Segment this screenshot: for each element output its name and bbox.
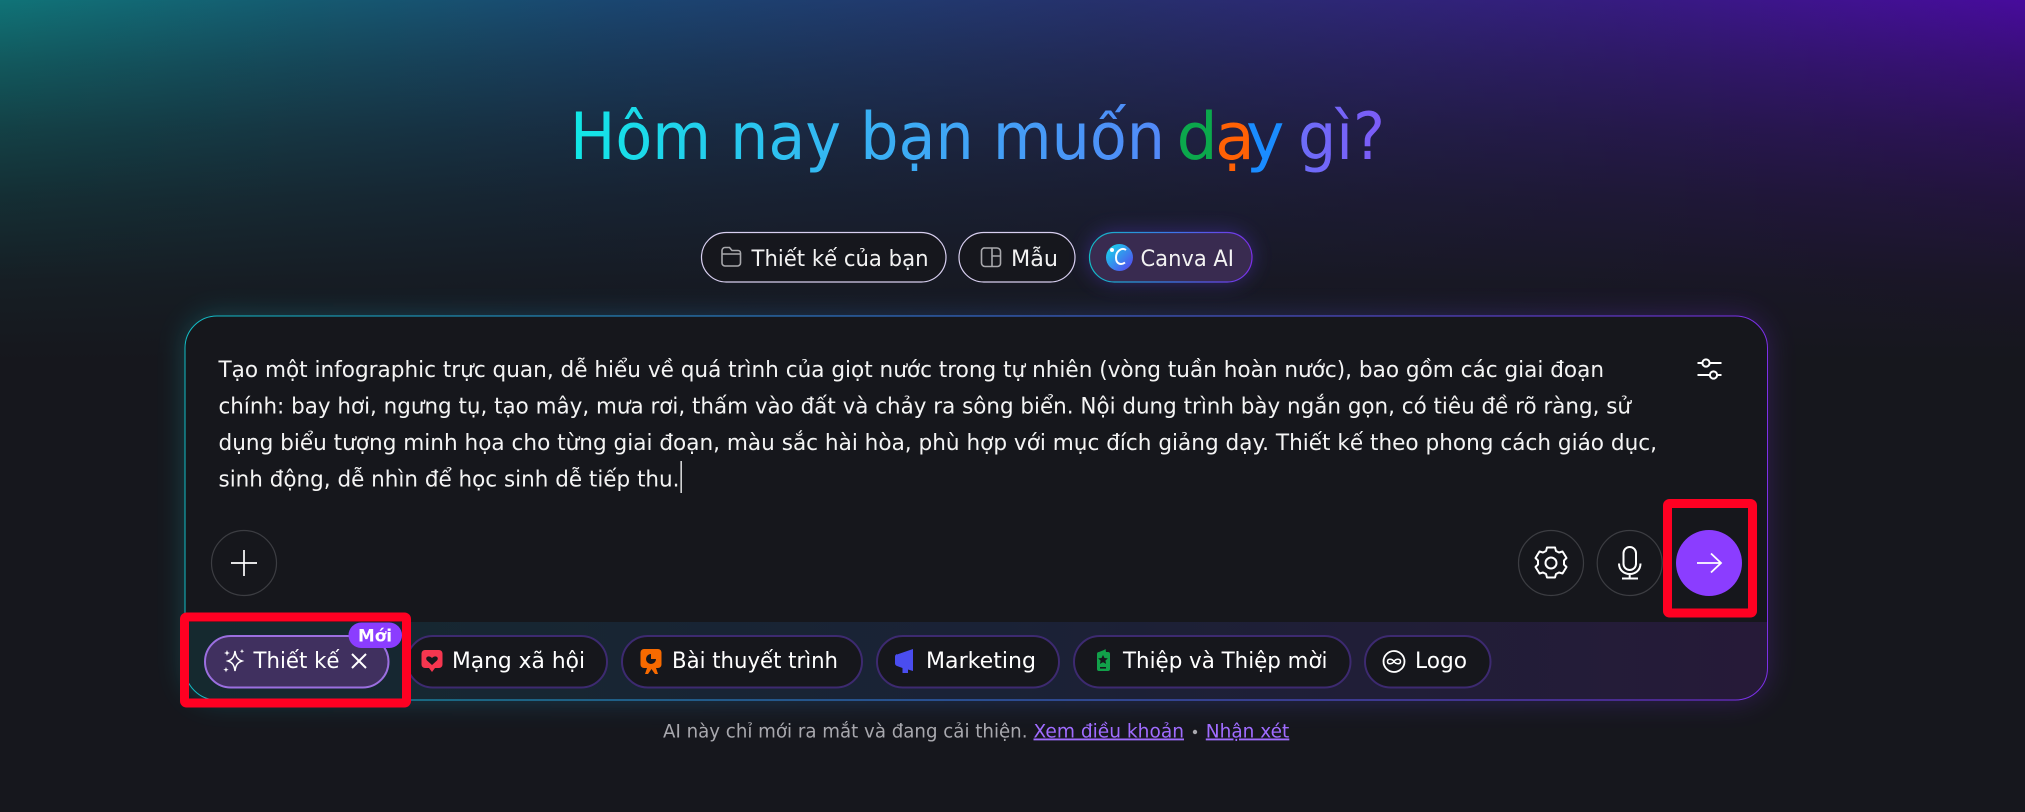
prompt text — [218, 355, 1657, 492]
title: d — [1176, 100, 1218, 175]
tab: Thiết kế của bạn: Thiết kế của bạn — [751, 246, 928, 272]
prompt text: dụng biểu tượng minh họa cho từng giai đoạn, màu sắc hài hòa, phù hợp với mục đích giảng dạy. Thiết kế theo phong cách giáo dục, — [218, 429, 1657, 456]
button: microphone — [1597, 530, 1662, 596]
red highlight: send button — [1668, 504, 1752, 613]
badge: new — [348, 622, 402, 648]
tab: Mẫu — [959, 232, 1075, 282]
badge: new: Mới — [358, 626, 392, 646]
tab: Thiết kế của bạn — [702, 232, 946, 282]
chip: Bài thuyết trình: Bài thuyết trình — [672, 648, 838, 674]
navigation tabs — [702, 232, 1252, 282]
prompt text: sinh động, dễ nhìn để học sinh dễ tiếp thu. — [218, 464, 680, 492]
button: add — [212, 530, 276, 596]
tab glow: Canva AI — [1089, 232, 1252, 282]
link: feedback: Nhận xét — [1206, 722, 1289, 742]
link: terms: Xem điều khoản — [1034, 720, 1184, 742]
red highlight: design chip — [184, 617, 406, 703]
chip: Thiệp và Thiệp mời — [1074, 636, 1350, 688]
prompt text: Tạo một infographic trực quan, dễ hiểu về quá trình của giọt nước trong tự nhiên (vòng tuần hoàn nước), bao gồm các giai đoạn — [218, 355, 1604, 383]
prompt card — [185, 316, 1768, 702]
icon: prompt settings sliders — [1698, 359, 1722, 379]
tab: Canva AI: Canva AI — [1140, 246, 1234, 272]
prompt text: chính: bay hơi, ngưng tụ, tạo mây, mưa rơi, thấm vào đất và chảy ra sông biển. Nội dung trình bày ngắn gọn, có tiêu đề rõ ràng, sử — [218, 392, 1633, 420]
category band — [185, 622, 1768, 702]
chip: Logo: Logo — [1415, 648, 1467, 674]
footer disclaimer — [663, 720, 1289, 742]
button: settings — [1518, 530, 1584, 596]
card border — [185, 316, 1768, 700]
chip: Thiệp và Thiệp mời: Thiệp và Thiệp mời — [1122, 648, 1328, 674]
title: ạ — [1215, 100, 1255, 175]
title: gì? — [1298, 100, 1385, 175]
text caret — [680, 461, 682, 493]
title: y — [1246, 100, 1284, 175]
card glow — [185, 316, 1768, 700]
title: Hôm nay bạn muốn — [570, 100, 1165, 175]
tab: Mẫu: Mẫu — [1011, 244, 1058, 272]
chip: Thiết kế selected: Thiết kế — [253, 648, 340, 674]
category chips — [205, 636, 1490, 688]
tab: Canva AI — [1090, 232, 1252, 282]
chip: Marketing: Marketing — [926, 648, 1036, 674]
footer disclaimer: AI này chỉ mới ra mắt và đang cải thiện. — [663, 720, 1028, 742]
chip: Marketing — [877, 636, 1059, 688]
chip: Logo — [1365, 636, 1490, 688]
chip: Thiết kế selected — [205, 636, 388, 688]
chip: Mạng xã hội: Mạng xã hội — [452, 648, 585, 674]
button: send — [1676, 530, 1742, 596]
chip: Bài thuyết trình — [622, 636, 862, 688]
chip: Mạng xã hội — [407, 636, 607, 688]
